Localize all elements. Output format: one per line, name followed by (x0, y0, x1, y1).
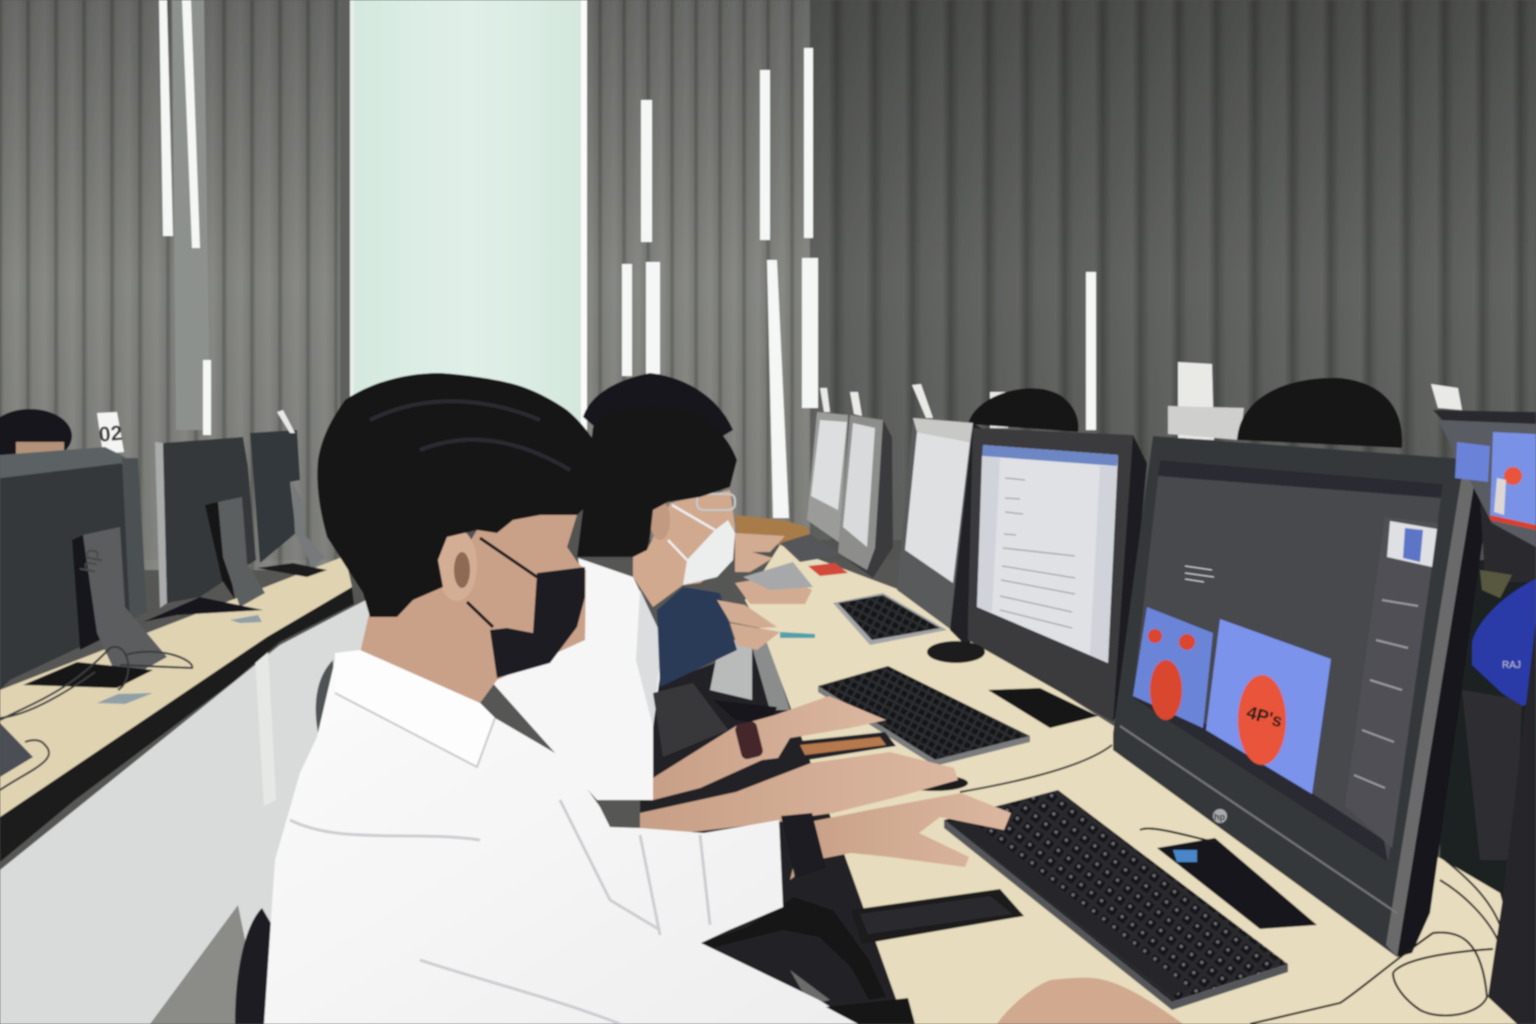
keyboard small far (833, 593, 947, 645)
screen (1133, 460, 1443, 862)
monitor stand and cables (960, 745, 1500, 1024)
left desk row (0, 556, 385, 1024)
placard with number (97, 412, 124, 454)
foreground right monitor edge (1488, 620, 1536, 1024)
window light streaks between blinds (159, 0, 1096, 518)
front student: lower hand (826, 978, 1183, 1024)
placard with number: 02 (98, 422, 123, 447)
far student: hair (583, 373, 733, 450)
right-side student in blue (1472, 570, 1536, 706)
cables on left desk (0, 647, 192, 790)
monitor four (838, 415, 893, 578)
right-side student in blue: RAJ (1502, 660, 1521, 671)
front student: black mask (467, 538, 585, 678)
front student: neck and face (360, 512, 586, 703)
orange bag on far desk (735, 515, 815, 545)
left foreground device (0, 723, 33, 777)
far right monitor (1433, 410, 1536, 582)
right-hand dark aisle behind monitors (1440, 560, 1536, 1024)
middle student: shirt (490, 558, 663, 800)
middle student: second forearm and hand (640, 752, 958, 838)
dark under-desk area (640, 640, 905, 1024)
mouse (927, 641, 985, 663)
chair (235, 660, 886, 1024)
phone on desk foreground (851, 889, 1024, 944)
small placards behind monitors (820, 362, 1462, 440)
front student: hair (317, 373, 612, 617)
middle student: arm and hand with watch (653, 696, 886, 800)
left monitor three (250, 410, 327, 577)
white pillar (350, 0, 587, 440)
right desk surface (745, 545, 1536, 1024)
monitor two with document (968, 428, 1147, 728)
large monitor with design software (1113, 436, 1488, 957)
middle student: dark trousers (653, 683, 777, 757)
screen: 4P's (1244, 702, 1285, 731)
left monitor two (143, 437, 265, 623)
keyboard foreground (944, 790, 1288, 1010)
red phone (808, 563, 848, 576)
left monitor one: hp (75, 546, 104, 575)
far keyboards (743, 534, 842, 590)
background students' heads behind monitors (968, 378, 1402, 448)
middle student: hair (577, 407, 737, 557)
far student: denim jacket and hands (657, 587, 815, 687)
large monitor with design software: hp (1214, 812, 1225, 822)
front student: collar (335, 650, 495, 767)
desk mouse by middle hand (902, 775, 968, 791)
front student: shirt (264, 660, 858, 1024)
monitor five (807, 412, 848, 543)
monitor three (897, 418, 985, 650)
middle student: neck and face with white mask (633, 490, 735, 607)
keyboard middle (818, 666, 1030, 766)
left person peeking behind monitor (0, 409, 72, 463)
phone on desk middle (790, 732, 896, 762)
left monitor one (0, 447, 167, 704)
front student: forearm, watch and hand (781, 793, 1011, 880)
far row hands (735, 533, 812, 604)
